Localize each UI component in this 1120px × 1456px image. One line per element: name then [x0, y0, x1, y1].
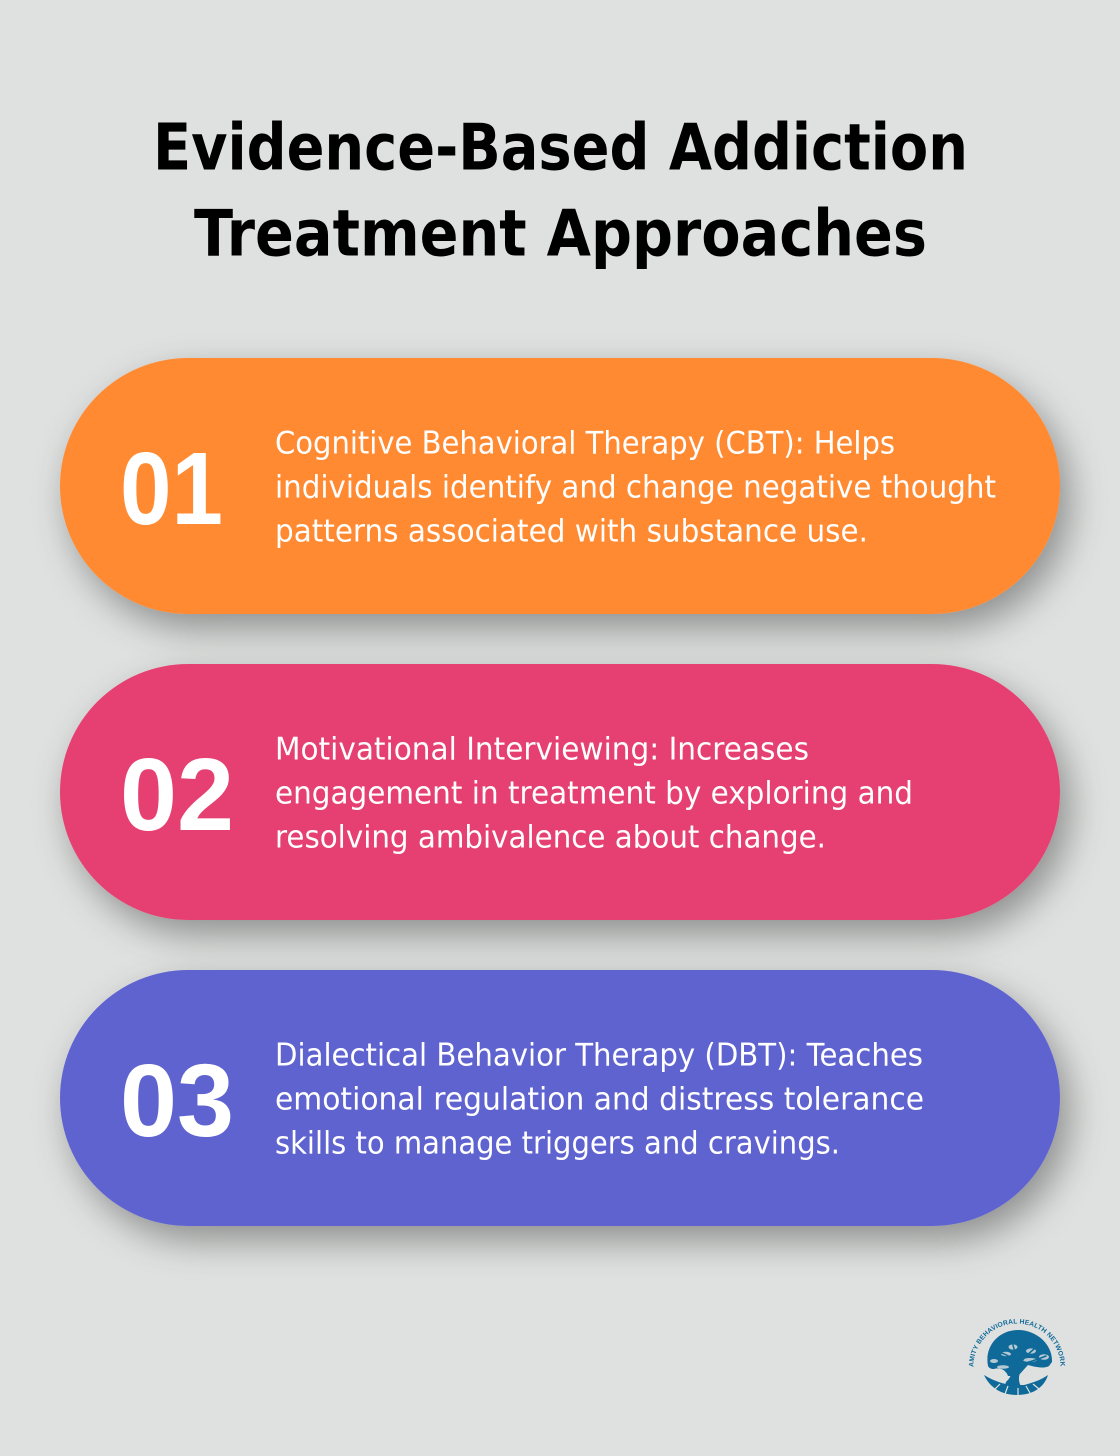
text block: CBT: Cognitive Behavioral Therapy (CBT): Helps — [275, 426, 895, 462]
logo canopy light patches — [990, 1344, 1049, 1369]
text block: DBT: emotional regulation and distress tolerance — [275, 1082, 924, 1118]
text block: motivational interviewing: Motivational Interviewing: Increases — [275, 732, 809, 768]
logo: Amity Behavioral Health Network — [968, 1319, 1066, 1395]
panel: step 03 dialectical behavior therapy — [60, 970, 1060, 1226]
text block: CBT — [275, 426, 996, 550]
text block: DBT — [275, 1038, 924, 1162]
logo ring text: AMITY BEHAVIORAL HEALTH NETWORK — [968, 1319, 1066, 1367]
text block: motivational interviewing: engagement in treatment by exploring and — [275, 776, 913, 812]
text block: DBT: skills to manage triggers and cravings. — [275, 1126, 840, 1162]
panel: step 01 cognitive behavioral therapy — [60, 358, 1060, 614]
logo root bowl — [984, 1375, 1048, 1395]
logo trunk — [1004, 1362, 1026, 1388]
logo root lines — [994, 1384, 1039, 1395]
text block: motivational interviewing — [275, 732, 913, 856]
pill: purple — [60, 970, 1060, 1226]
logo tree branches — [1001, 1345, 1046, 1366]
title: Evidence-Based Addiction — [153, 112, 968, 186]
title — [153, 112, 968, 272]
text block: CBT: patterns associated with substance use. — [275, 514, 868, 550]
panel: step 02 motivational interviewing — [60, 664, 1060, 920]
number 03: 03 — [120, 1043, 234, 1158]
pill: orange — [60, 358, 1060, 614]
text block: motivational interviewing: resolving ambivalence about change. — [275, 820, 826, 856]
number 01: 01 — [120, 431, 223, 546]
title: Treatment Approaches — [194, 198, 927, 272]
logo canopy — [987, 1330, 1052, 1376]
text block: DBT: Dialectical Behavior Therapy (DBT): Teaches — [275, 1038, 923, 1074]
text block: CBT: individuals identify and change negative thought — [275, 470, 996, 506]
pill: pink — [60, 664, 1060, 920]
number 02: 02 — [120, 737, 234, 852]
